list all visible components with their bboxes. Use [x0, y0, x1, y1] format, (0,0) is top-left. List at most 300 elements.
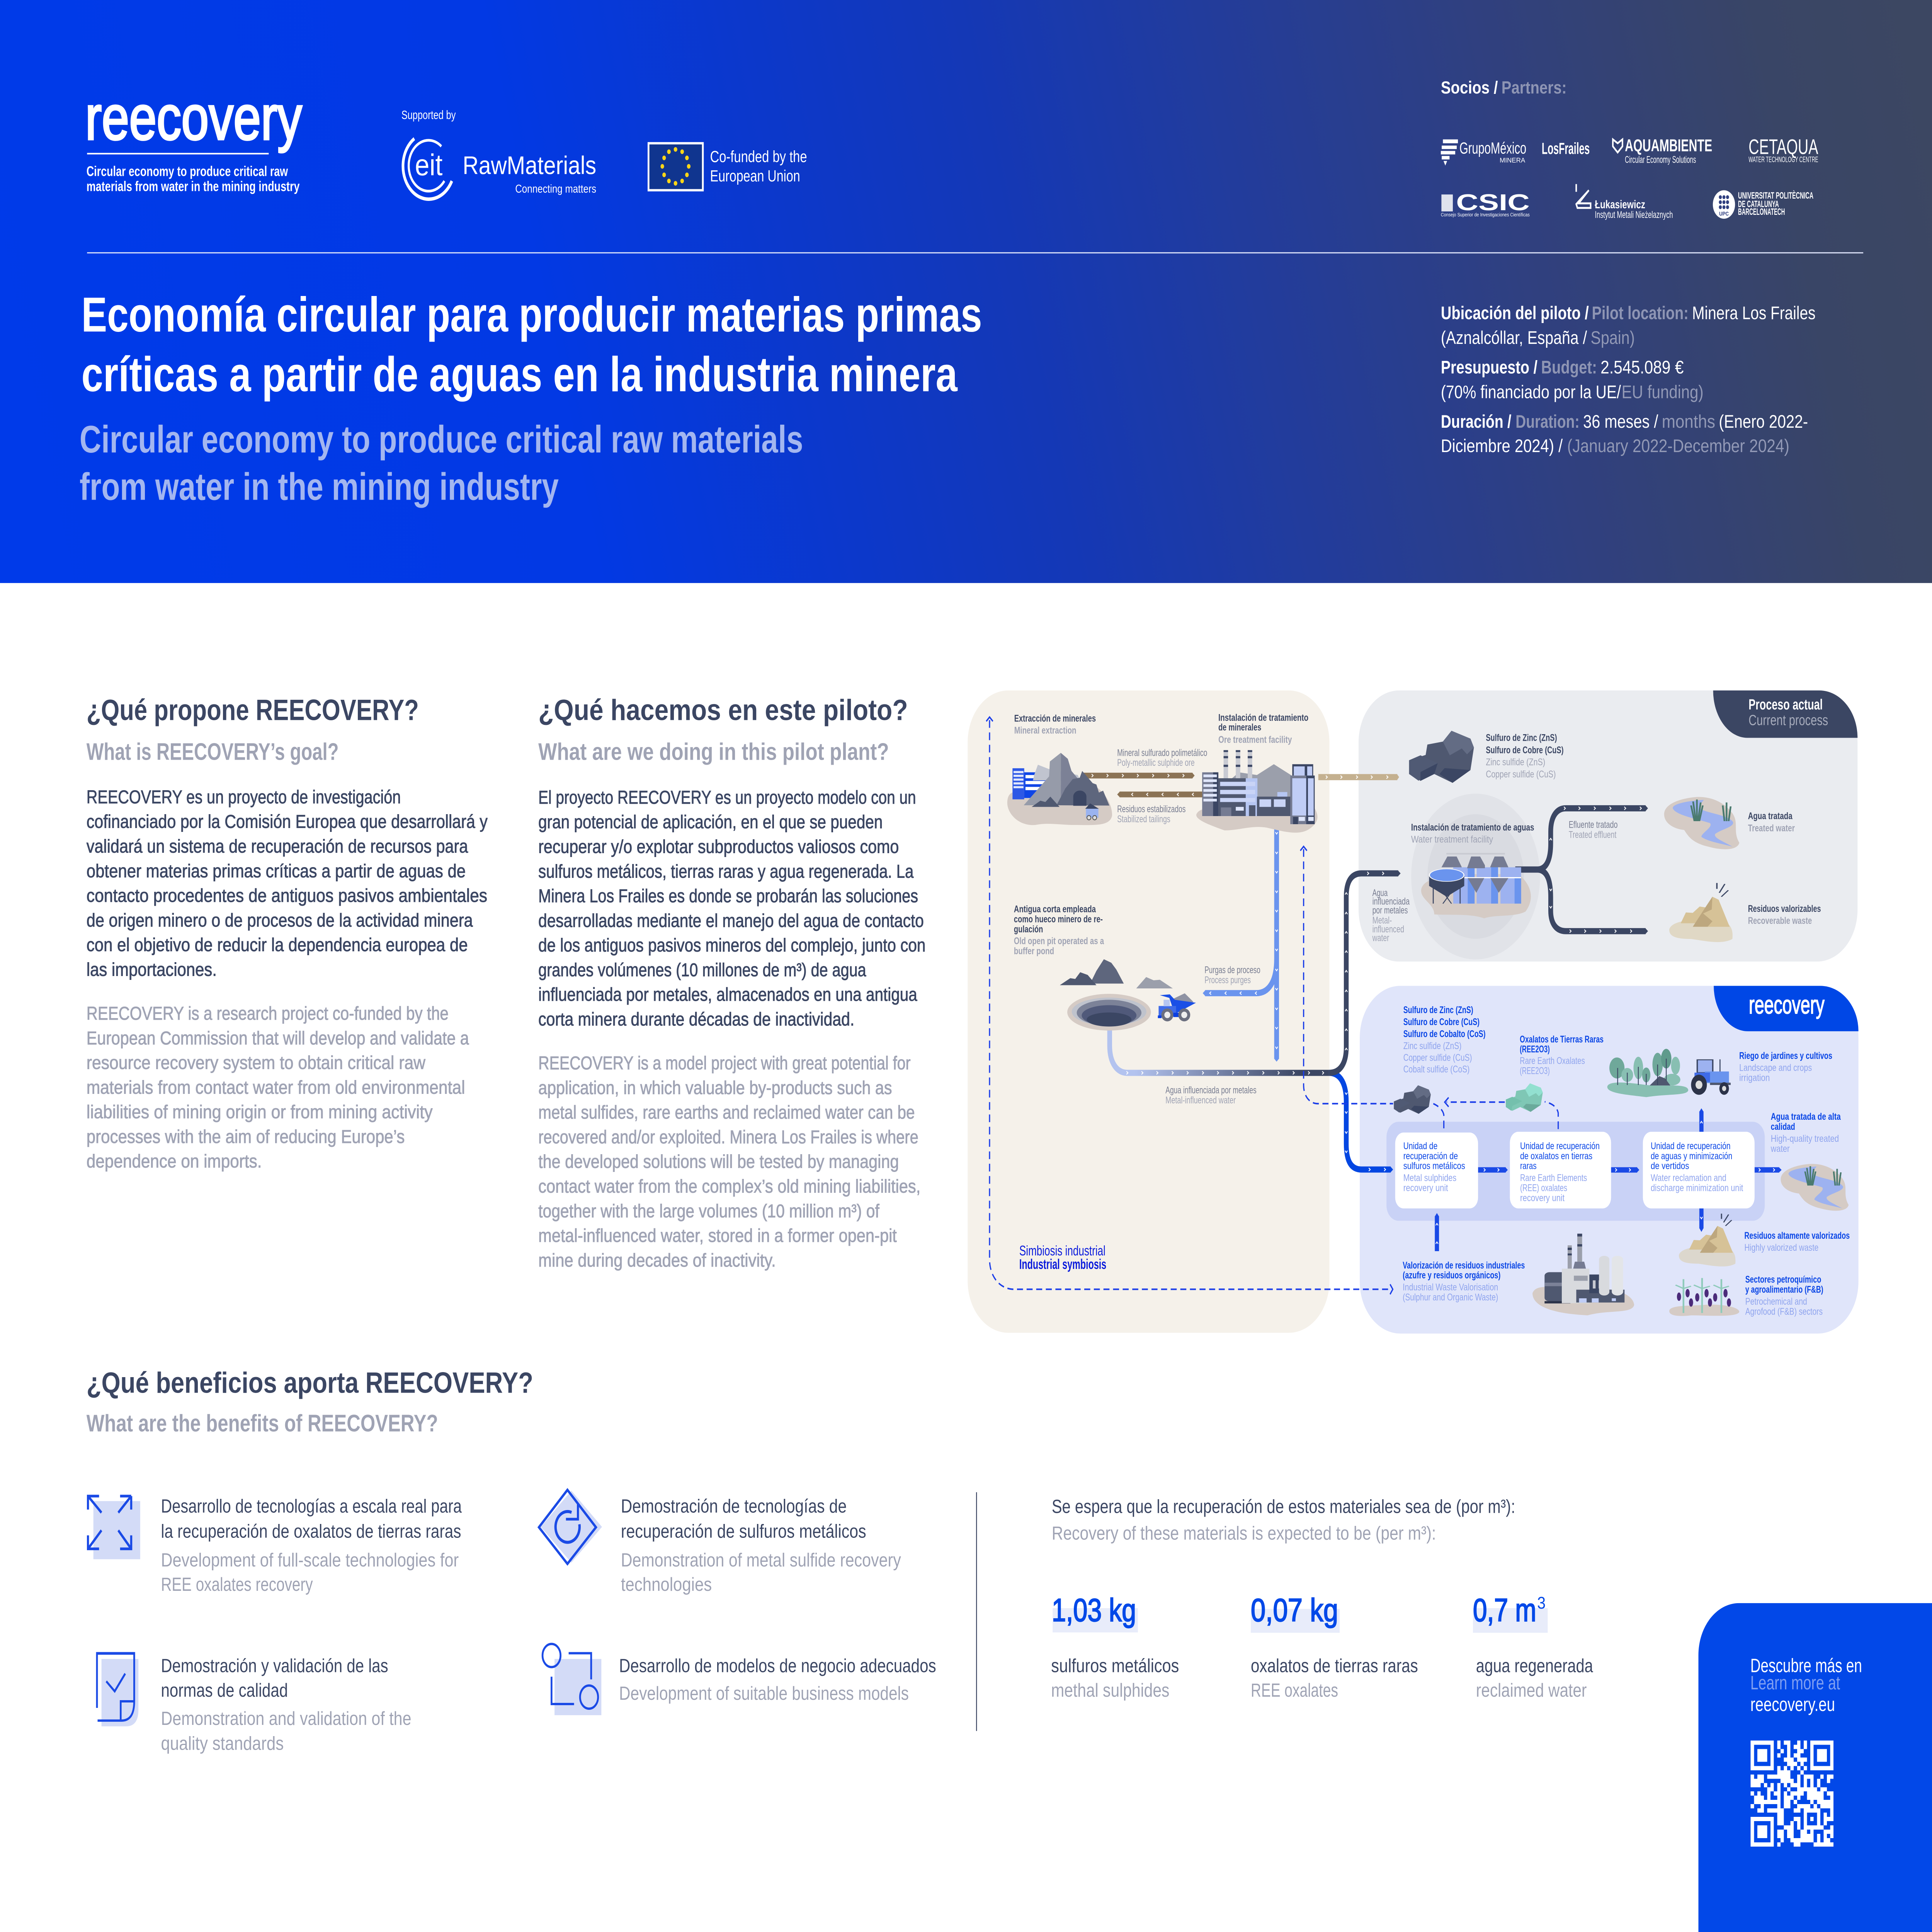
- label: metal-influenced water inlet: Metal-: [1372, 915, 1392, 925]
- partners heading: Partners:: [1502, 78, 1566, 97]
- logo: Aquambiente: AQUAMBIENTE: [1625, 136, 1712, 155]
- spanish paragraph: gran potencial de aplicación, en el que se pueden: [538, 812, 883, 833]
- logo: Grupo Mexico: MINERA: [1500, 156, 1525, 164]
- illustration: treated water wetland: [1664, 797, 1739, 849]
- logo: UPC: BARCELONATECH: [1738, 207, 1785, 217]
- benefit: metal sulfide recovery: technologies: [621, 1574, 712, 1595]
- english paragraph: European Commission that will develop and validate a: [87, 1028, 469, 1049]
- icon: recycling diamond: [539, 1490, 602, 1564]
- panel: current process: Current process: [1748, 712, 1828, 729]
- label: water treatment facility: [1411, 822, 1534, 845]
- benefit: full-scale technologies: Desarrollo de tecnologías a escala real para: [161, 1496, 462, 1517]
- logo: EU flag and co-funded text: Co-funded by the: [710, 148, 807, 165]
- logo: Lukasiewicz: Łukasiewicz: [1595, 198, 1645, 211]
- benefit: quality standards: quality standards: [161, 1733, 284, 1754]
- illustration: rare earth oxalate rock: [1506, 1083, 1543, 1112]
- unit box: rare earth oxalates recovery: de oxalatos en tierras: [1520, 1150, 1592, 1161]
- label: highly valorized waste: Residuos altamente valorizados: [1744, 1230, 1850, 1241]
- logo: CSIC: Consejo Superior de Investigaciones Científicas: [1441, 212, 1530, 218]
- label: recovered sulfides: Sulfuro de Cobre (CuS): [1403, 1017, 1480, 1027]
- panel: reecovery process: [1360, 986, 1859, 1333]
- benefit: metal sulfide recovery: [621, 1496, 901, 1595]
- tab: current process: [1713, 690, 1857, 738]
- unit box: water reclamation: Unidad de recuperación: [1651, 1141, 1731, 1151]
- project facts: location, budget, duration: (Enero 2022-: [1719, 412, 1808, 432]
- english subtitle: from water in the mining industry: [80, 465, 559, 508]
- label: stabilized tailings: Stabilized tailings: [1117, 813, 1170, 824]
- unit box: metal sulphides recovery: Unidad de: [1403, 1141, 1437, 1151]
- pipe: reecovery branch: [1329, 1073, 1393, 1173]
- benefit: full-scale technologies: la recuperación de oxalatos de tierras raras: [161, 1521, 461, 1542]
- logo: Lukasiewicz: Instytut Metali Nieżelaznych: [1595, 209, 1673, 220]
- section: what is REECOVERY: [87, 694, 488, 1172]
- logo: reecovery: Circular economy to produce critical raw: [87, 163, 288, 179]
- QR code: [1751, 1741, 1833, 1847]
- project facts: location, budget, duration: 2.545.089 €: [1600, 357, 1684, 378]
- stat: metal sulphides: [1051, 1592, 1179, 1701]
- illustration: dump truck: [1158, 993, 1196, 1021]
- dashed: reuse loop to treatment facility: [1300, 847, 1393, 1104]
- english paragraph: dependence on imports.: [87, 1151, 262, 1172]
- section: expected recovery figures: [1051, 1496, 1593, 1701]
- unit box: rare earth oxalates recovery: Rare Earth Elements: [1520, 1172, 1587, 1183]
- pipe: treated effluent and waste fork: [1515, 805, 1648, 934]
- stat: reclaimed water: reclaimed water: [1476, 1680, 1587, 1701]
- pipe: metal-influenced water: [1110, 1029, 1329, 1073]
- spanish paragraph: validará un sistema de recuperación de recursos para: [87, 836, 468, 857]
- label: petrochemical and agrofood sectors: [1745, 1274, 1823, 1317]
- unit box: rare earth oxalates recovery: raras: [1520, 1160, 1537, 1171]
- label: treated water: [1748, 810, 1795, 833]
- label: polymetallic sulphide ore: Mineral sulfurado polimetálico: [1117, 747, 1207, 758]
- illustration: recoverable waste pile: [1669, 883, 1733, 942]
- label: metal-influenced water inlet: influenciada: [1372, 896, 1410, 907]
- pipe: process purges: [1203, 828, 1279, 1062]
- label: industrial symbiosis: Simbiosis industrial: [1019, 1243, 1105, 1259]
- label: metal-influenced water inlet: [1372, 888, 1410, 943]
- logo: EIT RawMaterials: Connecting matters: [515, 182, 596, 195]
- logo: EU flag and co-funded text: European Union: [710, 167, 800, 185]
- label: irrigation: irrigation: [1739, 1072, 1770, 1083]
- dashed: rare earth to sulfide links: [1433, 1097, 1558, 1141]
- english paragraph: application, in which valuable by-products such as: [538, 1078, 892, 1099]
- unit box: water reclamation: de aguas y minimización: [1651, 1150, 1732, 1161]
- label: high-quality treated water: calidad: [1771, 1121, 1795, 1132]
- pipes: reecovery unit links: [1435, 1108, 1782, 1251]
- label: recoverable waste: Recoverable waste: [1748, 915, 1812, 926]
- stat: REE oxalates: REE oxalates: [1251, 1680, 1338, 1701]
- project facts: location, budget, duration: Duration:: [1515, 412, 1580, 432]
- spanish paragraph: desarrolladas mediante el manejo del agua de contacto: [538, 910, 924, 931]
- label: treated water: Agua tratada: [1748, 810, 1793, 821]
- english paragraph: liabilities of mining origin or from mining activity: [87, 1102, 433, 1122]
- label: industrial waste valorisation: Industrial Waste Valorisation: [1403, 1282, 1498, 1293]
- logo: UPC: DE CATALUNYA: [1738, 199, 1779, 209]
- english heading: What is REECOVERY’s goal?: [87, 738, 338, 765]
- label: stabilized tailings: [1117, 804, 1185, 824]
- heading: ¿Qué hacemos en este piloto?: [538, 694, 908, 726]
- pipe: current process branch: [1329, 870, 1401, 1073]
- project facts: location, budget, duration: EU funding): [1622, 382, 1704, 402]
- label: zinc and copper sulfide: Sulfuro de Cobre (CuS): [1486, 745, 1564, 755]
- call to action text: [1750, 1655, 1862, 1715]
- label: recoverable waste: [1748, 903, 1821, 926]
- label: rare earth oxalates: Rare Earth Oxalates: [1520, 1055, 1585, 1066]
- spanish paragraph: influenciada por metales, almacenados en una antigua: [538, 985, 917, 1005]
- label: petrochemical and agrofood sectors: Petrochemical and: [1745, 1296, 1807, 1307]
- logo: reecovery: materials from water in the mining industry: [87, 179, 300, 194]
- label: high-quality treated water: Agua tratada de alta: [1771, 1111, 1841, 1122]
- spanish paragraph: Minera Los Frailes es donde se probarán las soluciones: [538, 886, 918, 906]
- pipe: stabilized tailings: [1117, 792, 1207, 797]
- spanish paragraph: grandes volúmenes (10 millones de m³) de agua: [538, 960, 866, 981]
- benefit: full-scale technologies: Development of full-scale technologies for: [161, 1550, 459, 1571]
- label: treated water: Treated water: [1748, 823, 1795, 833]
- panel: current process: [1359, 690, 1857, 962]
- label: treated effluent: Treated effluent: [1569, 829, 1617, 840]
- intro text: [1052, 1496, 1515, 1544]
- logo: Aquambiente: Circular Economy Solutions: [1625, 154, 1696, 165]
- logo: EIT RawMaterials: RawMaterials: [463, 151, 596, 180]
- project facts: location, budget, duration: (70% financiado por la UE/: [1441, 382, 1621, 402]
- header band: [0, 0, 1932, 583]
- english paragraph: mine during decades of inactivity.: [538, 1250, 776, 1271]
- spanish paragraph: las importaciones.: [87, 959, 217, 980]
- label: recovered sulfides: Zinc sulfide (ZnS): [1403, 1040, 1461, 1051]
- heading: ¿Qué propone REECOVERY?: [87, 694, 419, 726]
- panel: current process: Proceso actual: [1748, 696, 1823, 713]
- label: rare earth oxalates: (REE2O3): [1520, 1044, 1550, 1054]
- label: high-quality treated water: water: [1770, 1143, 1790, 1154]
- project facts: location, budget, duration: months: [1662, 412, 1715, 432]
- logo: Aquambiente: [1613, 136, 1712, 165]
- partners heading: Socios /: [1441, 78, 1498, 97]
- label: rare earth oxalates: (REE2O3): [1520, 1065, 1550, 1076]
- illustration: open pit: [1060, 959, 1173, 1031]
- label: irrigation: Riego de jardines y cultivos: [1739, 1050, 1832, 1061]
- illustration: water treatment tanks: [1421, 853, 1531, 918]
- english paragraph: contact water from the complex’s old mining liabilities,: [538, 1176, 920, 1197]
- english paragraph: the developed solutions will be tested by managing: [538, 1151, 899, 1172]
- english paragraph: together with the large volumes (10 million m³) of: [538, 1201, 879, 1221]
- project facts: location, budget, duration: Pilot location:: [1592, 303, 1689, 323]
- spanish paragraph: sulfuros metálicos, tierras raras y agua regenerada. La: [538, 861, 914, 882]
- label: metal-influenced water inlet: water: [1372, 932, 1389, 943]
- label: highly valorized waste: Highly valorized waste: [1744, 1242, 1818, 1253]
- labels: reecovery panel: [1403, 1005, 1850, 1317]
- english paragraph: metal sulfides, rare earths and reclaimed water can be: [538, 1102, 915, 1123]
- label: polymetallic sulphide ore: [1117, 747, 1207, 768]
- spanish paragraph: con el objetivo de reducir la dependencia europea de: [87, 935, 468, 956]
- label: treated effluent: Efluente tratado: [1569, 819, 1617, 830]
- process band: [1386, 1122, 1765, 1221]
- unit box: water reclamation: discharge minimization unit: [1651, 1182, 1743, 1193]
- unit box: rare earth oxalates recovery: [1510, 1132, 1611, 1208]
- label: water treatment facility: Water treatment facility: [1411, 834, 1493, 845]
- label: irrigation: Landscape and crops: [1739, 1062, 1812, 1073]
- english paragraph: REECOVERY is a research project co-funded by the: [87, 1003, 449, 1024]
- benefit: full-scale technologies: [161, 1496, 462, 1595]
- label: old open pit: buffer pond: [1014, 946, 1054, 956]
- project facts: location, budget, duration: Presupuesto /: [1441, 357, 1537, 378]
- panel: industrial symbiosis: [968, 690, 1330, 1333]
- label: stabilized tailings: Residuos estabilizados: [1117, 804, 1185, 814]
- title: [82, 287, 982, 402]
- project facts: location, budget, duration: Minera Los Frailes: [1692, 303, 1816, 323]
- logo: Grupo Mexico: GrupoMéxico: [1459, 139, 1526, 157]
- label: polymetallic sulphide ore: Poly-metallic sulphide ore: [1117, 757, 1195, 768]
- english paragraph: resource recovery system to obtain critical raw: [87, 1053, 426, 1073]
- label: ore treatment: [1218, 712, 1308, 745]
- unit box: metal sulphides recovery: recuperación de: [1403, 1150, 1458, 1161]
- english heading: What are the benefits of REECOVERY?: [87, 1410, 438, 1437]
- label: petrochemical and agrofood sectors: Agrofood (F&B) sectors: [1745, 1306, 1823, 1317]
- benefit: business models: [619, 1655, 936, 1704]
- panel: learn more with QR code: [1698, 1603, 1932, 1932]
- english paragraph: materials from contact water from old environmental: [87, 1077, 465, 1098]
- benefit: full-scale technologies: REE oxalates recovery: [161, 1574, 313, 1595]
- title: Economía circular para producir materias primas: [82, 287, 982, 342]
- logo: EIT RawMaterials: Supported by: [401, 108, 456, 122]
- logo: EU flag and co-funded text: [648, 143, 807, 190]
- process diagram: [968, 690, 1859, 1333]
- project facts: location, budget, duration: Spain): [1591, 328, 1635, 348]
- label: old open pit: como hueco minero de re-: [1014, 914, 1103, 924]
- illustration: sulfide rock (reecovery): [1394, 1085, 1431, 1114]
- label: metal-influenced water inlet: por metales: [1372, 905, 1408, 916]
- english heading: What are we doing in this pilot plant?: [538, 738, 889, 765]
- label: treated effluent: [1569, 819, 1617, 840]
- label: metal-influenced water: Metal-influenced water: [1165, 1095, 1236, 1105]
- spanish paragraph: recuperar y/o explotar subproductos valiosos como: [538, 837, 899, 857]
- illustration: ore treatment facility: [1196, 750, 1318, 833]
- logo: EIT RawMaterials: [401, 108, 596, 199]
- icon: business model: [543, 1644, 601, 1715]
- spanish paragraph: contacto procedentes de antiguos pasivos ambientales: [87, 886, 487, 906]
- label: industrial waste valorisation: [1403, 1260, 1525, 1303]
- label: old open pit: [1014, 904, 1104, 956]
- label: metal-influenced water: Agua influenciada por metales: [1165, 1085, 1257, 1095]
- logo: Cetaqua: WATER TECHNOLOGY CENTRE: [1748, 155, 1818, 164]
- spanish paragraph: de los antiguos pasivos mineros del complejo, junto con: [538, 935, 925, 956]
- label: mineral extraction: [1014, 713, 1096, 736]
- labels: current process panel: [1372, 732, 1821, 943]
- project facts: location, budget, duration: Budget:: [1541, 357, 1597, 378]
- benefit: quality standards: normas de calidad: [161, 1680, 288, 1701]
- intro text: Recovery of these materials is expected to be (per m³):: [1052, 1523, 1436, 1544]
- unit box: rare earth oxalates recovery: (REE) oxalates: [1520, 1182, 1567, 1193]
- pipe: polymetallic ore: [1083, 773, 1195, 779]
- logo: Grupo Mexico: [1441, 139, 1526, 166]
- stat: metal sulphides: 1,03 kg: [1052, 1592, 1136, 1628]
- logo: Cetaqua: CETAQUA: [1748, 136, 1818, 159]
- dashed: industrial symbiosis loop: [986, 717, 1393, 1294]
- logo: Lukasiewicz: [1576, 184, 1673, 220]
- project facts: location, budget, duration: Duración /: [1441, 412, 1512, 432]
- unit box: metal sulphides recovery: recovery unit: [1403, 1182, 1448, 1193]
- heading: ¿Qué beneficios aporta REECOVERY?: [87, 1367, 533, 1399]
- project facts: location, budget, duration: Ubicación del piloto /: [1441, 303, 1589, 323]
- label: rare earth oxalates: Oxalatos de Tierras Raras: [1520, 1034, 1604, 1044]
- label: recovered sulfides: Cobalt sulfide (CoS): [1403, 1064, 1469, 1075]
- label: industrial waste valorisation: (Sulphur and Organic Waste): [1403, 1292, 1498, 1303]
- stat: reclaimed water: [1473, 1592, 1593, 1701]
- unit box: metal sulphides recovery: sulfuros metálicos: [1403, 1160, 1465, 1171]
- panel: reecovery process: reecovery: [1749, 991, 1825, 1019]
- label: metal-influenced water inlet: influenced: [1372, 923, 1404, 934]
- benefit: quality standards: Demonstration and validation of the: [161, 1708, 411, 1729]
- logo: CSIC: [1441, 190, 1530, 218]
- benefit: business models: Desarrollo de modelos de negocio adecuados: [619, 1655, 936, 1676]
- label: mineral extraction: Mineral extraction: [1014, 725, 1077, 736]
- label: petrochemical and agrofood sectors: Sectores petroquímico: [1745, 1274, 1821, 1285]
- section: benefits: [87, 1367, 977, 1754]
- label: metal-influenced water inlet: Agua: [1372, 888, 1388, 898]
- partners heading: [1441, 78, 1566, 97]
- label: metal-influenced water: [1165, 1085, 1257, 1105]
- benefit: metal sulfide recovery: Demonstration of metal sulfide recovery: [621, 1550, 901, 1571]
- spanish paragraph: [87, 787, 488, 980]
- call to action text: Learn more at: [1750, 1673, 1840, 1694]
- logo: Los Frailes: LosFrailes: [1542, 139, 1590, 158]
- unit box: metal sulphides recovery: [1395, 1133, 1478, 1208]
- label: zinc and copper sulfide: [1486, 732, 1564, 780]
- label: mineral extraction: Extracción de minerales: [1014, 713, 1096, 724]
- benefit: metal sulfide recovery: Demostración de tecnologías de: [621, 1496, 847, 1517]
- logo: UPC: [1713, 190, 1813, 219]
- unit box: rare earth oxalates recovery: Unidad de recuperación: [1520, 1141, 1600, 1151]
- stat: metal sulphides: sulfuros metálicos: [1051, 1655, 1179, 1676]
- label: highly valorized waste: [1744, 1230, 1850, 1253]
- english subtitle: [80, 418, 803, 508]
- halo: water treatment: [1411, 794, 1540, 959]
- spanish paragraph: cofinanciado por la Comisión Europea que desarrollará y: [87, 811, 488, 832]
- stat: reclaimed water: 3: [1537, 1594, 1546, 1612]
- icon: quality document: [97, 1652, 138, 1726]
- label: recoverable waste: Residuos valorizables: [1748, 903, 1821, 914]
- label: industrial waste valorisation: (azufre y residuos orgánicos): [1403, 1270, 1500, 1281]
- label: ore treatment: Instalación de tratamiento: [1218, 712, 1308, 723]
- label: process purges: Purgas de proceso: [1204, 964, 1260, 975]
- stat: REE oxalates: [1251, 1592, 1418, 1701]
- english paragraph: metal-influenced water, stored in a former open-pit: [538, 1226, 897, 1246]
- unit box: metal sulphides recovery: Metal sulphides: [1403, 1172, 1456, 1183]
- spanish paragraph: obtener materias primas críticas a partir de aguas de: [87, 861, 466, 881]
- english paragraph: [87, 1003, 469, 1172]
- unit box: rare earth oxalates recovery: recovery unit: [1520, 1192, 1565, 1203]
- unit box: water reclamation: Water reclamation and: [1651, 1172, 1726, 1183]
- illustration: sulfide rock (current process): [1409, 731, 1474, 783]
- illustration: agrofood plants: [1669, 1278, 1739, 1316]
- illustration: high-quality water wetland: [1781, 1164, 1849, 1211]
- labels: beige panel: [1014, 712, 1308, 1272]
- unit box: water reclamation: de vertidos: [1651, 1160, 1689, 1171]
- stat: REE oxalates: 0,07 kg: [1251, 1592, 1338, 1628]
- logo: CSIC: CSIC: [1456, 190, 1530, 216]
- label: recovered sulfides: Sulfuro de Cobalto (CoS): [1403, 1029, 1486, 1039]
- pipe: solid residue to rock: [1318, 774, 1399, 780]
- spanish paragraph: REECOVERY es un proyecto de investigación: [87, 787, 401, 808]
- label: recovered sulfides: Copper sulfide (CuS): [1403, 1052, 1472, 1063]
- label: zinc and copper sulfide: Sulfuro de Zinc (ZnS): [1486, 732, 1557, 743]
- english subtitle: Circular economy to produce critical raw materials: [80, 418, 803, 461]
- label: recovered sulfides: Sulfuro de Zinc (ZnS): [1403, 1005, 1473, 1015]
- logo: reecovery: reecovery: [85, 83, 302, 153]
- benefit: quality standards: [161, 1655, 411, 1754]
- label: petrochemical and agrofood sectors: y agroalimentario (F&B): [1745, 1284, 1823, 1295]
- logo: UPC: UNIVERSITAT POLITÈCNICA: [1738, 190, 1813, 201]
- unit box: water reclamation: [1643, 1132, 1755, 1208]
- logo: EIT RawMaterials: eit: [415, 148, 442, 182]
- label: zinc and copper sulfide: Copper sulfide (CuS): [1486, 769, 1556, 780]
- stat: reclaimed water: agua regenerada: [1476, 1655, 1593, 1676]
- label: water treatment facility: Instalación de tratamiento de aguas: [1411, 822, 1534, 833]
- illustration: industrial waste valorisation plant: [1532, 1234, 1634, 1315]
- label: ore treatment: de minerales: [1218, 722, 1261, 733]
- label: process purges: Process purges: [1204, 975, 1251, 985]
- label: old open pit: Old open pit operated as a: [1014, 935, 1104, 946]
- label: irrigation: [1739, 1050, 1832, 1083]
- title: críticas a partir de aguas en la industria minera: [82, 347, 958, 402]
- benefit: metal sulfide recovery: recuperación de sulfuros metálicos: [621, 1521, 866, 1542]
- partner logos: [1441, 136, 1818, 220]
- tab: reecovery: [1714, 986, 1859, 1031]
- label: industrial symbiosis: [1019, 1243, 1106, 1272]
- project facts: location, budget, duration: (January 2022-December 2024): [1567, 436, 1789, 456]
- section: what are we doing in this pilot: [538, 694, 925, 1271]
- label: old open pit: Antigua corta empleada: [1014, 904, 1096, 915]
- english paragraph: REECOVERY is a model project with great potential for: [538, 1053, 911, 1074]
- spanish paragraph: [538, 787, 925, 1030]
- benefit: business models: Development of suitable business models: [619, 1683, 909, 1704]
- label: process purges: [1204, 964, 1260, 985]
- icon: scale arrows: [88, 1496, 140, 1559]
- spanish paragraph: corta minera durante décadas de inactividad.: [538, 1009, 854, 1030]
- illustration: trees and tractor: [1607, 1049, 1731, 1097]
- logo: reecovery: [85, 83, 302, 194]
- spanish paragraph: El proyecto REECOVERY es un proyecto modelo con un: [538, 787, 916, 808]
- logo: UPC: UPC: [1719, 211, 1729, 217]
- project facts: location, budget, duration: [1441, 303, 1816, 456]
- call to action text: reecovery.eu: [1750, 1694, 1835, 1715]
- stat: reclaimed water: 0,7 m: [1473, 1592, 1536, 1628]
- label: old open pit: gulación: [1014, 923, 1043, 934]
- project facts: location, budget, duration: 36 meses /: [1583, 412, 1658, 432]
- label: industrial symbiosis: Industrial symbiosis: [1019, 1256, 1106, 1272]
- stat: REE oxalates: oxalatos de tierras raras: [1251, 1655, 1418, 1676]
- english paragraph: processes with the aim of reducing Europe’s: [87, 1127, 405, 1147]
- illustration: mine mountain: [1007, 753, 1112, 825]
- label: high-quality treated water: [1770, 1111, 1841, 1154]
- english paragraph: [538, 1053, 920, 1271]
- spanish paragraph: de origen minero o de procesos de la actividad minera: [87, 910, 473, 931]
- project facts: location, budget, duration: (Aznalcóllar, España /: [1441, 328, 1587, 348]
- english paragraph: recovered and/or exploited. Minera Los Frailes is where: [538, 1127, 918, 1148]
- illustration: highly valorized waste pile: [1679, 1214, 1735, 1267]
- label: industrial waste valorisation: Valorización de residuos industriales: [1403, 1260, 1525, 1270]
- label: zinc and copper sulfide: Zinc sulfide (ZnS): [1486, 757, 1545, 767]
- stat: metal sulphides: methal sulphides: [1051, 1680, 1169, 1701]
- header gradient background: [0, 0, 1932, 583]
- label: ore treatment: Ore treatment facility: [1218, 734, 1292, 745]
- benefit: quality standards: Demostración y validación de las: [161, 1655, 388, 1676]
- label: rare earth oxalates: [1520, 1034, 1604, 1076]
- label: recovered sulfides: [1403, 1005, 1486, 1075]
- label: high-quality treated water: High-quality treated: [1771, 1133, 1839, 1144]
- call to action text: Descubre más en: [1750, 1655, 1862, 1676]
- intro text: Se espera que la recuperación de estos materiales sea de (por m³):: [1052, 1496, 1515, 1517]
- project facts: location, budget, duration: Diciembre 2024) /: [1441, 436, 1563, 456]
